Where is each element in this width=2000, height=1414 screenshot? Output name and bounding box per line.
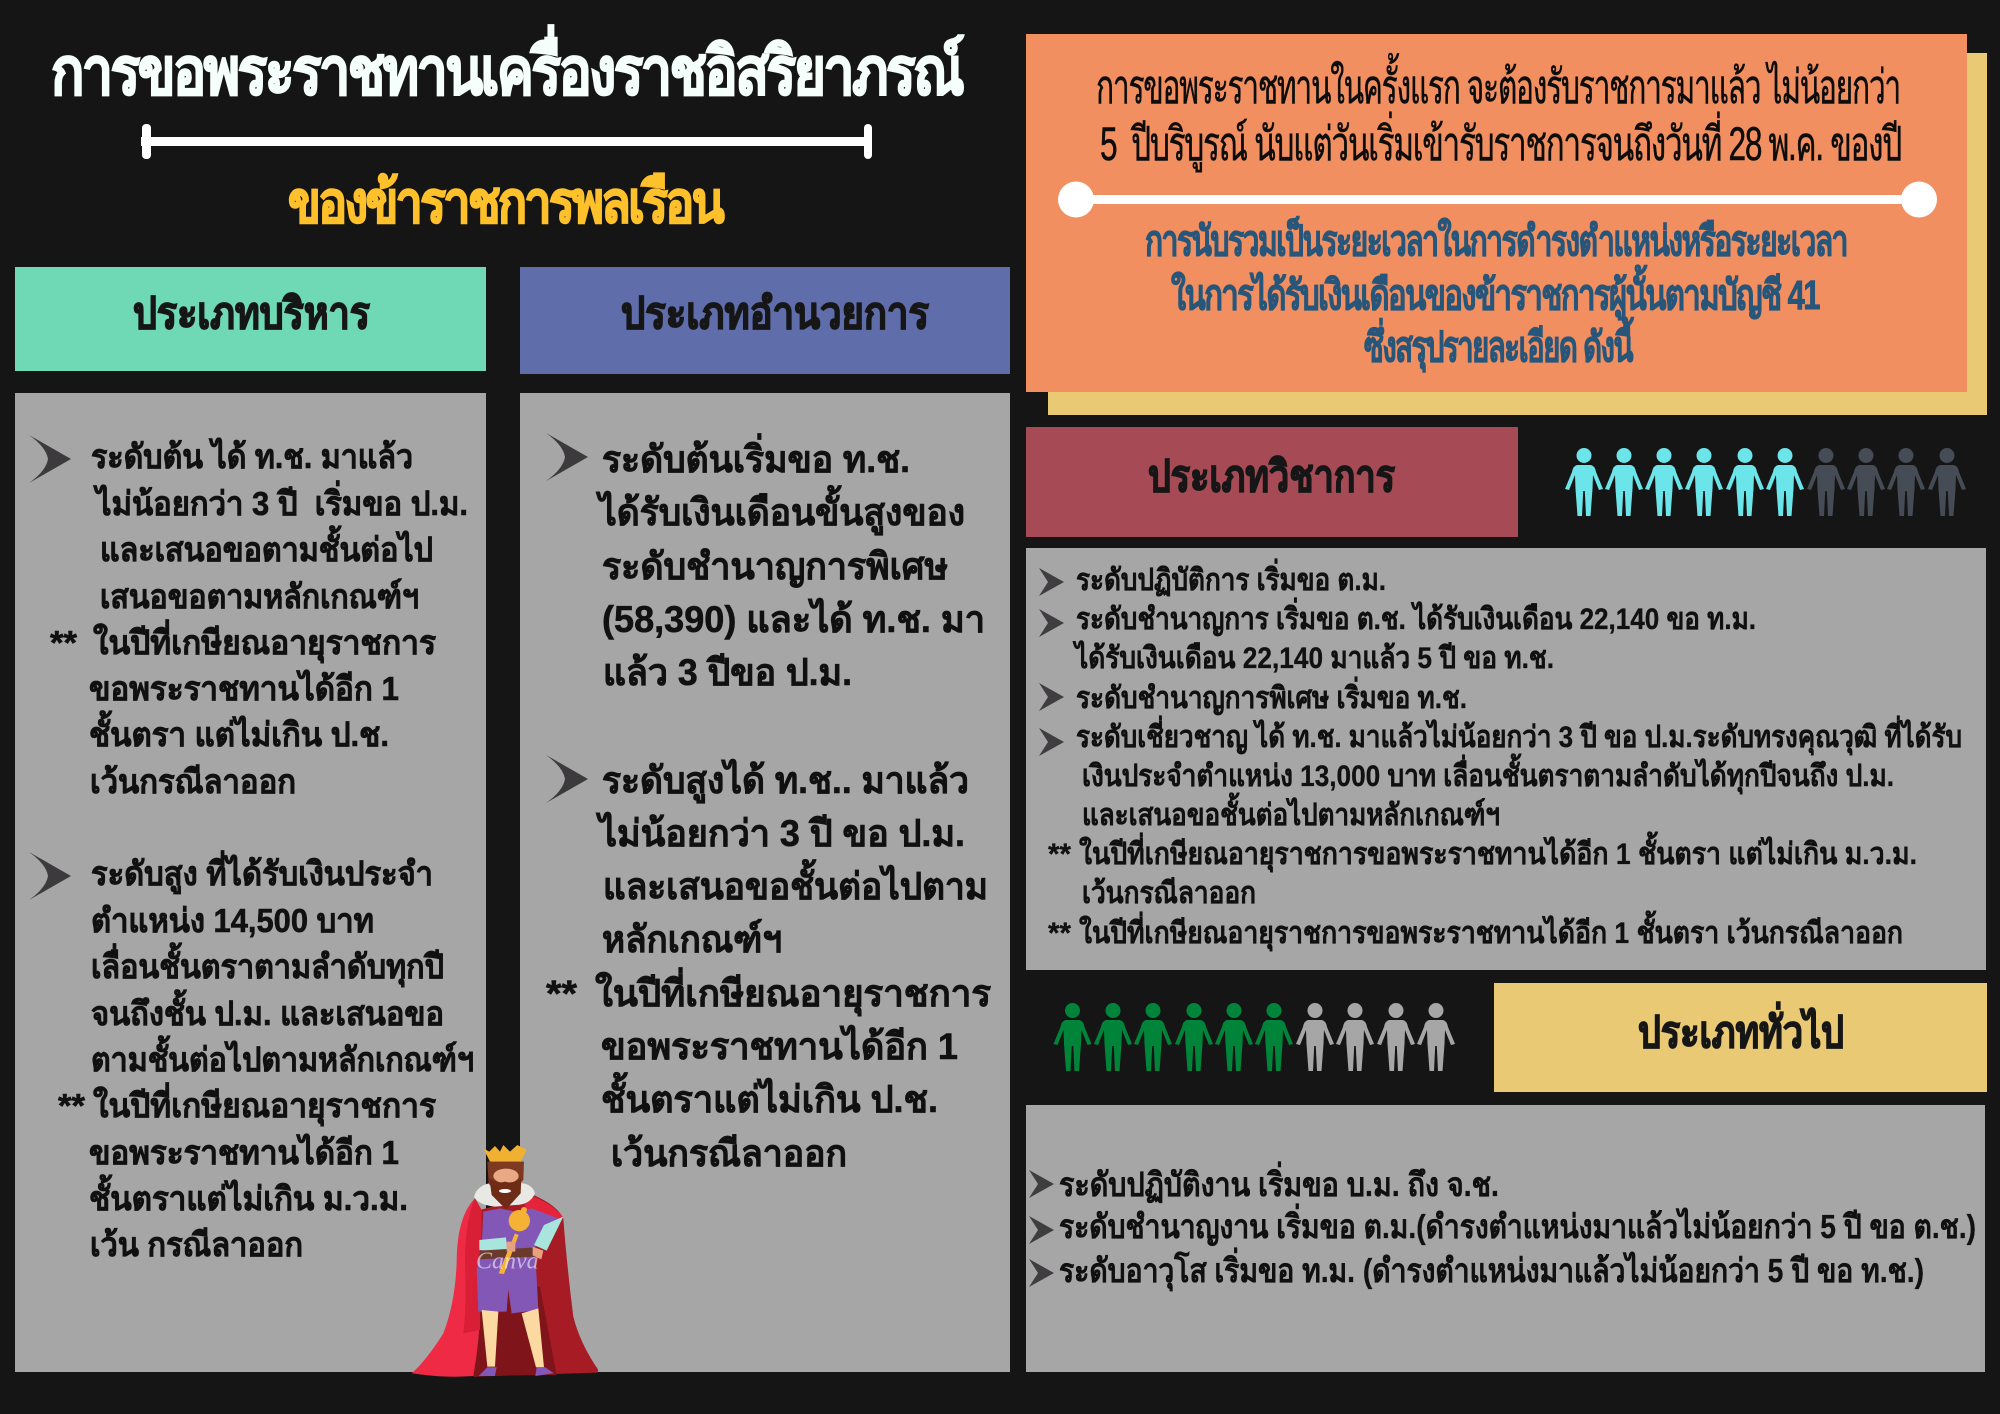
text block: managerial senior level: หลักเกณฑ์ฯ xyxy=(602,919,782,960)
icons: arrows xyxy=(1029,1170,1054,1287)
text block: executive entry level: ระดับต้น ได้ ท.ช. มาแล้ว xyxy=(91,437,413,475)
header: managerial type xyxy=(520,267,1010,374)
text block: executive senior level: ** xyxy=(58,1087,85,1124)
panel: executive type details xyxy=(15,393,486,1372)
icons: arrows xyxy=(1039,568,1064,756)
text block: executive senior level: ตามชั้นต่อไปตามหลักเกณฑ์ฯ xyxy=(91,1035,474,1078)
text block: managerial entry level: (58,390) และได้ ท.ช. มา xyxy=(602,597,985,640)
header: general type: ประเภททั่วไป xyxy=(1638,1002,1844,1057)
title: การขอพระราชทานเครื่องราชอิสริยาภรณ์ xyxy=(51,24,964,108)
callout detail text xyxy=(1145,216,1847,373)
icon: people row cyan xyxy=(1565,448,1966,516)
callout detail text: ซึ่งสรุปรายละเอียด ดังนี้ xyxy=(1364,317,1635,373)
title divider bar xyxy=(141,124,872,159)
text block: executive senior level: ชั้นตราแต่ไม่เกิน ม.ว.ม. xyxy=(89,1174,408,1217)
text block: executive senior level: ในปีที่เกษียณอายุราชการ xyxy=(93,1082,436,1127)
text block: executive entry level: ไม่น้อยกว่า 3 ปี เริ่มขอ ป.ม. xyxy=(93,480,468,522)
text block: academic levels: ในปีที่เกษียณอายุราชการขอพระราชทานได้อีก 1 ชั้นตรา เว้นกรณีลาออก xyxy=(1079,910,1903,952)
watermark text: Canva xyxy=(476,1249,539,1275)
text block: general levels xyxy=(1059,1161,1976,1292)
text block: managerial entry level: ได้รับเงินเดือนขั้นสูงของ xyxy=(595,485,965,536)
text block: executive senior level xyxy=(58,850,474,1263)
text block: executive senior level: เว้น กรณีลาออก xyxy=(90,1226,303,1263)
callout heading text xyxy=(1096,53,1901,173)
icon: arrow xyxy=(546,755,588,803)
text block: executive entry level xyxy=(50,437,468,800)
text block: executive senior level: ระดับสูง ที่ได้รับเงินประจำ xyxy=(91,850,433,895)
text block: executive entry level: เว้นกรณีลาออก xyxy=(90,763,296,800)
text block: executive senior level: ตำแหน่ง 14,500 บาท xyxy=(91,902,374,939)
text block: managerial senior level: ชั้นตราแต่ไม่เกิน ป.ช. xyxy=(601,1072,938,1120)
text block: executive entry level: ในปีที่เกษียณอายุราชการ xyxy=(93,619,436,664)
text block: managerial senior level: เว้นกรณีลาออก xyxy=(611,1133,847,1174)
illustration: king xyxy=(412,1145,598,1377)
text block: executive senior level: เลื่อนชั้นตราตามลำดับทุกปี xyxy=(91,942,444,988)
text block: managerial senior level: ไม่น้อยกว่า 3 ปี ขอ ป.ม. xyxy=(595,811,965,854)
text block: managerial senior level xyxy=(546,758,991,1174)
subtitle: ของข้าราชการพลเรือน xyxy=(288,171,725,235)
callout divider xyxy=(1058,182,1937,218)
text block: academic levels: เว้นกรณีลาออก xyxy=(1082,877,1256,910)
header: executive type: ประเภทบริหาร xyxy=(133,290,370,338)
text block: academic levels: ระดับชำนาญการ เริ่มขอ ต.ช. ได้รับเงินเดือน 22,140 ขอ ท.ม. xyxy=(1076,597,1756,637)
text block: academic levels: ระดับชำนาญการพิเศษ เริ่มขอ ท.ช. xyxy=(1076,676,1467,716)
text block: executive entry level: ชั้นตรา แต่ไม่เกิน ป.ช. xyxy=(89,710,389,753)
header: managerial type: ประเภทอำนวยการ xyxy=(621,290,929,338)
text block: general levels: ระดับปฏิบัติงาน เริ่มขอ บ.ม. ถึง จ.ช. xyxy=(1059,1161,1499,1203)
text block: academic levels: ในปีที่เกษียณอายุราชการขอพระราชทานได้อีก 1 ชั้นตรา แต่ไม่เกิน ม.ว.ม. xyxy=(1079,831,1917,873)
header: executive type xyxy=(15,267,486,371)
text block: managerial entry level: ระดับชำนาญการพิเศษ xyxy=(602,546,948,588)
callout: orange eligibility box xyxy=(1026,34,1987,415)
text block: executive entry level: ขอพระราชทานได้อีก 1 xyxy=(89,669,399,707)
icon: arrow xyxy=(29,852,71,900)
text block: academic levels: เงินประจำตำแหน่ง 13,000 บาท เลื่อนชั้นตราตามลำดับได้ทุกปีจนถึง ป.ม. xyxy=(1082,753,1894,795)
text block: managerial entry level: แล้ว 3 ปีขอ ป.ม. xyxy=(603,652,852,693)
text block: managerial senior level: ขอพระราชทานได้อีก 1 xyxy=(601,1024,958,1067)
text block: executive entry level: ** xyxy=(50,624,77,661)
header: general type xyxy=(1494,983,1987,1092)
icon: arrow xyxy=(29,435,71,483)
panel: general type details xyxy=(1026,1105,1985,1372)
text block: executive entry level: และเสนอขอตามชั้นต่อไป xyxy=(100,525,433,568)
text block: academic levels: และเสนอขอชั้นต่อไปตามหลักเกณฑ์ฯ xyxy=(1082,792,1500,832)
text block: academic levels: ** xyxy=(1048,838,1071,871)
text block: academic levels: ได้รับเงินเดือน 22,140 มาแล้ว 5 ปี ขอ ท.ช. xyxy=(1072,640,1554,675)
text block: academic levels: ระดับปฏิบัติการ เริ่มขอ ต.ม. xyxy=(1076,558,1386,597)
text block: academic levels xyxy=(1048,558,1962,952)
panel: academic type details xyxy=(1026,548,1986,970)
text block: executive entry level: เสนอขอตามหลักเกณฑ์ฯ xyxy=(100,578,419,615)
header: academic type xyxy=(1026,427,1518,537)
text block: executive senior level: ขอพระราชทานได้อีก 1 xyxy=(89,1133,399,1171)
text block: managerial senior level: ในปีที่เกษียณอายุราชการ xyxy=(595,967,991,1017)
header: academic type: ประเภทวิชาการ xyxy=(1148,453,1395,501)
text block: managerial senior level: ระดับสูงได้ ท.ช.. มาแล้ว xyxy=(602,758,969,804)
icon: arrow xyxy=(546,433,588,481)
text block: managerial senior level: และเสนอขอชั้นต่อไปตาม xyxy=(603,859,988,907)
text block: managerial entry level xyxy=(595,433,985,693)
icon: people row green xyxy=(1054,1003,1455,1071)
text block: managerial entry level: ระดับต้นเริ่มขอ ท.ช. xyxy=(602,433,910,480)
text block: managerial senior level: ** xyxy=(546,973,578,1014)
panel: managerial type details xyxy=(520,393,1010,1372)
text block: academic levels: ** xyxy=(1048,917,1071,950)
text block: executive senior level: จนถึงชั้น ป.ม. และเสนอขอ xyxy=(91,989,444,1032)
